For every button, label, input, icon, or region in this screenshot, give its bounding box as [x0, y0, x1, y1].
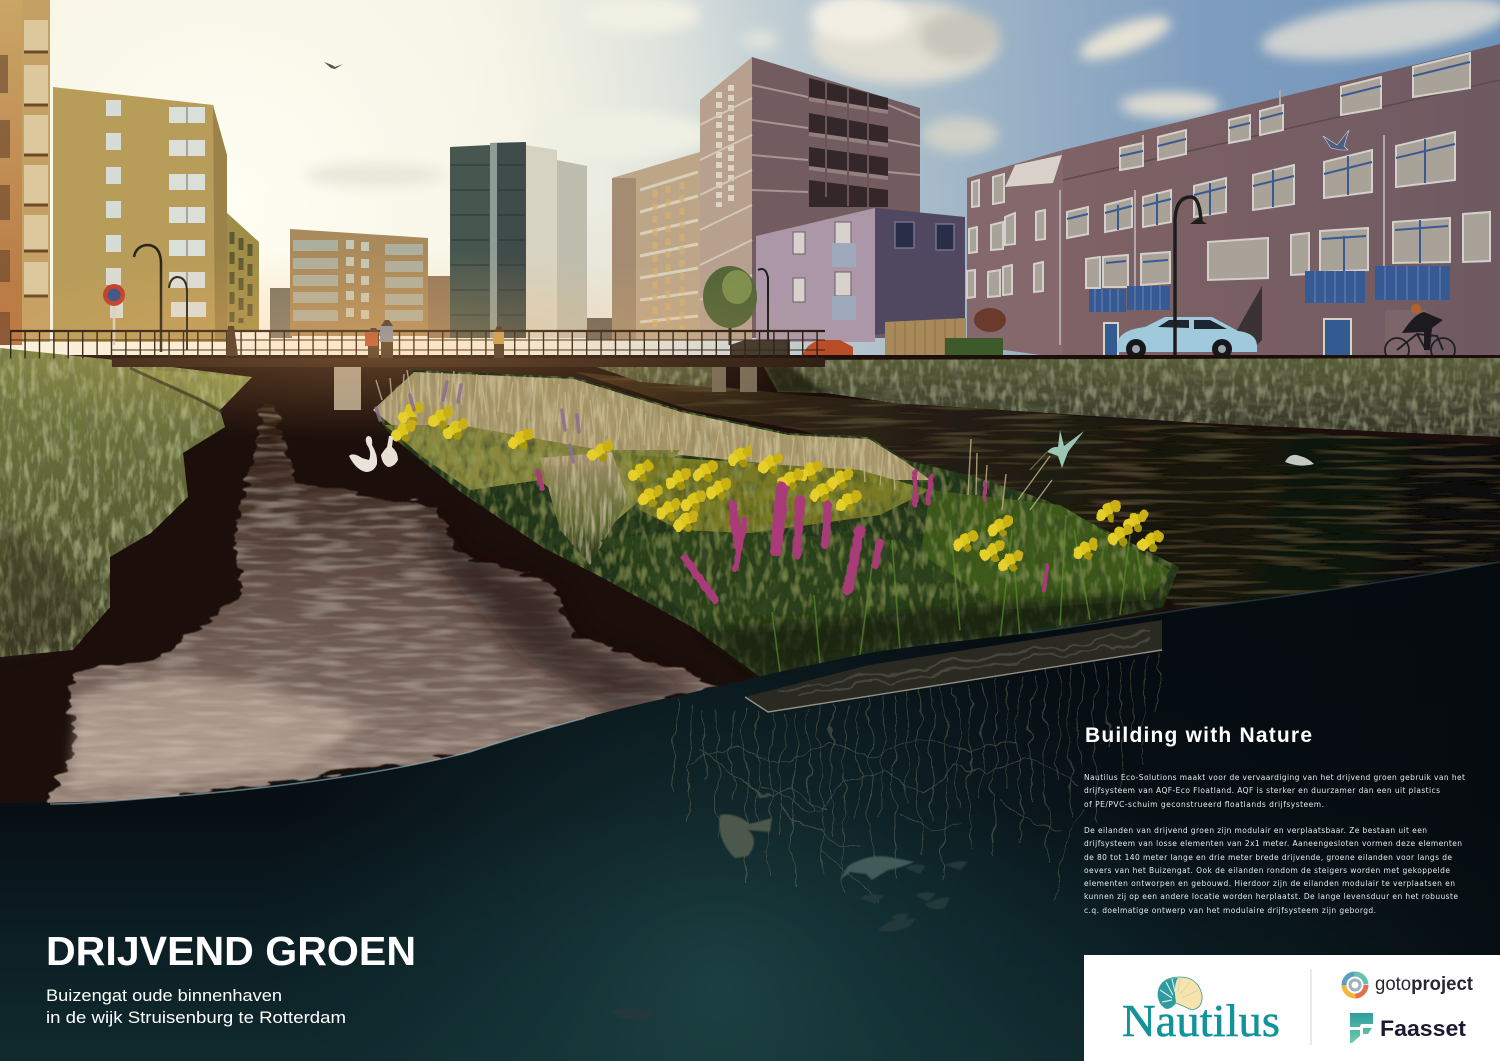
clouds: [305, 0, 1500, 340]
window frames blue: [1067, 62, 1470, 272]
waterline highlight: [50, 718, 585, 804]
subtitle: Buizengat oude binnenhaven: [46, 986, 282, 1005]
building: yellow low block: [226, 212, 259, 332]
awning: [1005, 155, 1062, 187]
plant mass: [373, 370, 1179, 682]
tree: [703, 266, 757, 345]
underwater section: [0, 562, 1500, 1061]
bird in sky: [324, 62, 343, 69]
paragraph two: de 80 tot 140 meter lange en drie meter brede drijvende, groene eilanden voor langs de: [1084, 853, 1452, 862]
warm sun flare over the bridge: [0, 250, 900, 440]
title block: [46, 928, 416, 1027]
canal water: [0, 355, 1500, 805]
purple flower spikes: [538, 472, 1047, 600]
divider: [1310, 969, 1312, 1045]
logo panel: [1084, 955, 1500, 1061]
building: far left tower: [0, 0, 50, 345]
duck on right water: [1285, 455, 1314, 466]
people on the bridge: [226, 320, 504, 358]
paragraph two: De eilanden van drijvend groen zijn modulair en verplaatsbaar. Ze bestaan uit een: [1084, 826, 1427, 835]
far water, right of island: [575, 372, 1500, 610]
paragraph two: elementen ontworpen en gebouwd. Hierdoor zijn de eilanden modulair te verplaatsen en: [1084, 879, 1455, 888]
dark lower foliage: [700, 590, 1163, 680]
text panel: Building with Nature: [1084, 724, 1465, 915]
street lamp right: [758, 197, 1207, 378]
right quay bank: [585, 358, 1500, 437]
small cars on the quay: [730, 340, 853, 356]
paragraph one: [1084, 773, 1465, 809]
downpipes: [1060, 90, 1384, 345]
sky: [0, 0, 1500, 420]
heading: Building with Nature: [1085, 724, 1312, 747]
floating platform: [745, 620, 1162, 712]
paragraph two: drijfsysteem van losse elementen van 2x1 meter. Aaneengesloten vormen deze elementen: [1084, 839, 1462, 848]
no-entry road sign: [103, 284, 125, 345]
logo: Faasset icon: [1350, 1013, 1373, 1043]
car: [1117, 317, 1257, 359]
subtitle: in de wijk Struisenburg te Rotterdam: [46, 1008, 346, 1027]
entry stairs: [1237, 286, 1262, 352]
paragraph one: of PE/PVC-schuim geconstrueerd floatlands drijfsysteem.: [1084, 800, 1324, 809]
paragraph one: drijfsysteem van AQF-Eco Floatland. AQF is sterker en duurzamer dan een uit plastics: [1084, 786, 1440, 795]
paragraph two: oevers van het Buizengat. Ook de eilanden rondom de steigers worden met gekoppelde: [1084, 866, 1450, 875]
subtitle: [46, 986, 346, 1027]
paragraph one: Nautilus Eco-Solutions maakt voor de vervaardiging van het drijvend groen gebruik van het: [1084, 773, 1465, 782]
bird on right: [1323, 130, 1349, 150]
lit tall grasses: [373, 372, 930, 480]
small fish shoal: [610, 861, 968, 1020]
fish: large bream: [719, 814, 772, 858]
doors: [1104, 319, 1351, 360]
building: right brick row: [945, 44, 1500, 362]
building: mid block: [290, 229, 428, 336]
street lamps left: [134, 245, 187, 352]
yellow flowers: [391, 402, 1163, 572]
logo: Nautilus wordmark: Nautilus: [1122, 995, 1280, 1046]
windows: [967, 53, 1490, 298]
distant buildings: [226, 142, 616, 340]
hummingbird: [1030, 430, 1084, 470]
fish: [610, 814, 968, 1020]
plant roots: [675, 652, 1158, 905]
fish: cod: [840, 856, 914, 880]
paragraph two: [1084, 826, 1462, 915]
floating island plants: [373, 370, 1179, 682]
swans: [349, 436, 398, 472]
title: DRIJVEND GROEN: [46, 928, 416, 974]
building: yellow-tan block: [53, 87, 227, 342]
hedge and red shrub: [974, 308, 1006, 332]
paragraph two: c.q. doelmatige ontwerp van het modulaire drijfsysteem zijn geborgd.: [1084, 906, 1376, 915]
cyclist: [1385, 304, 1455, 362]
left grassy bank: [0, 348, 252, 657]
bridge: [10, 320, 825, 410]
water reflection: [50, 403, 719, 805]
logo: gotoproject ring: [1344, 974, 1366, 996]
yellow-green middle: [385, 425, 680, 535]
logo: Nautilus shell: [1158, 977, 1202, 1010]
building: pink box: [756, 208, 966, 358]
building: central high-rise: [612, 57, 920, 340]
logo: gotoproject wordmark: gotoproject: [1375, 974, 1474, 995]
balconies: [1089, 266, 1450, 312]
building: blue-grey tower: [450, 142, 587, 338]
grass blades: [376, 370, 1052, 510]
logo: Faasset wordmark: Faasset: [1380, 1016, 1467, 1041]
paragraph two: kunnen zij op een andere locatie worden herplaatst. De lange levensduur en het robuuste: [1084, 892, 1458, 901]
